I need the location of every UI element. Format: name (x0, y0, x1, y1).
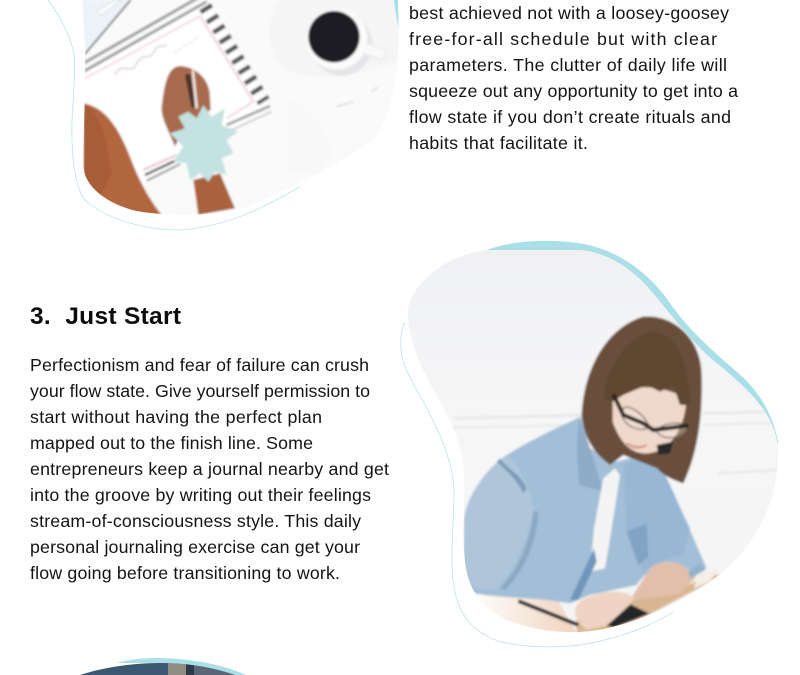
photo content (80, 0, 403, 223)
photo blob: hand writing in planner (48, 0, 403, 230)
blob outline (48, 0, 300, 230)
photo blob: woman writing at a desk (390, 235, 790, 652)
text block: just start paragraph: entrepreneurs keep a journal nearby and get (30, 459, 389, 479)
teal accent crescent (487, 241, 778, 443)
text block: rituals paragraph (409, 3, 738, 153)
text block: just start paragraph (30, 355, 389, 583)
heading: 3. Just Start: 3. Just Start (30, 303, 181, 330)
text block: rituals paragraph: flow state if you don’t create rituals and (409, 107, 731, 127)
panel: step 3 just start (30, 235, 790, 652)
text block: rituals paragraph: habits that facilitate it. (409, 133, 588, 153)
photo content (408, 250, 778, 632)
teal accent (387, 0, 399, 32)
text block: rituals paragraph: best achieved not with a loosey-goosey (409, 3, 729, 23)
text block: just start paragraph: start without having the perfect plan (30, 407, 322, 427)
text block: just start paragraph: into the groove by writing out their feelings (30, 485, 371, 505)
text block: rituals paragraph: free-for-all schedule but with clear (409, 29, 717, 49)
blob outline (401, 322, 673, 647)
hair (582, 317, 702, 483)
photo top (80, 663, 235, 675)
teal accent crescent (117, 658, 248, 675)
text block: just start paragraph: personal journaling exercise can get your (30, 537, 360, 557)
jacket (463, 417, 707, 603)
text block: just start paragraph: Perfectionism and fear of failure can crush (30, 355, 369, 375)
text block: rituals paragraph: squeeze out any opportunity to get into a (409, 81, 738, 101)
panel: rituals section (48, 0, 738, 230)
text block: rituals paragraph: parameters. The clutter of daily life will (409, 55, 727, 75)
panel: next section photo blob (70, 658, 248, 675)
text block: just start paragraph: your flow state. Give yourself permission to (30, 381, 370, 401)
text block: just start paragraph: mapped out to the finish line. Some (30, 433, 313, 453)
text block: just start paragraph: stream-of-consciousness style. This daily (30, 511, 361, 531)
text block: just start paragraph: flow going before transitioning to work. (30, 563, 340, 583)
